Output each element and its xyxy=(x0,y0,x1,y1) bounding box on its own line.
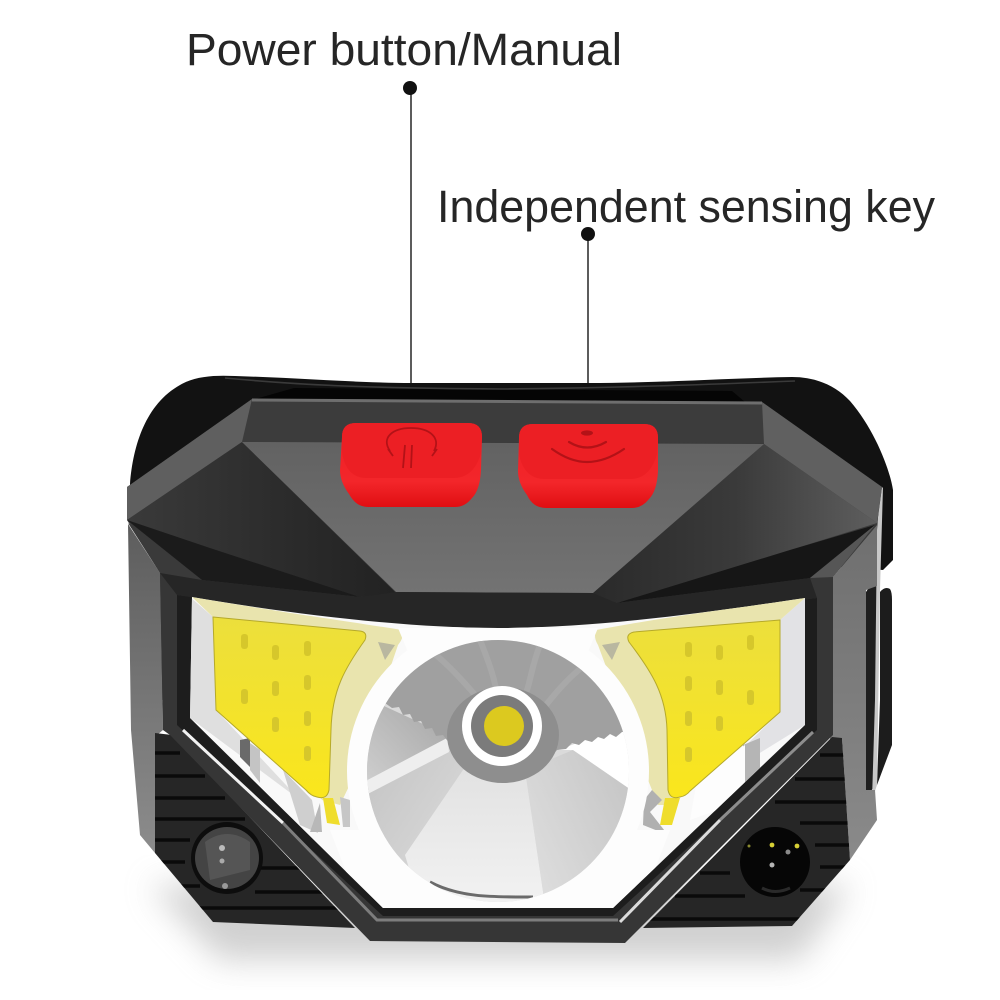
right IR sensor lens xyxy=(740,827,810,897)
left upper facet xyxy=(127,399,252,520)
right lower facet xyxy=(617,525,875,603)
centre facet xyxy=(242,442,764,593)
lower centre facet xyxy=(405,770,545,905)
left dark facet xyxy=(127,442,396,597)
lens window glass xyxy=(190,597,805,908)
icon: power symbol xyxy=(387,428,437,468)
headlamp body xyxy=(127,376,893,960)
lens window frame xyxy=(160,573,833,943)
ground shadow xyxy=(150,885,850,960)
upper left facet xyxy=(367,706,446,780)
main LED xyxy=(462,686,542,766)
white facet xyxy=(559,732,629,788)
lower right facet xyxy=(550,750,628,890)
infographic: headlamp with labelled controls xyxy=(127,32,935,974)
callout line: power button xyxy=(403,81,417,384)
right COB LED panel xyxy=(628,620,780,798)
upper grey fan xyxy=(386,640,623,752)
right dark facet xyxy=(593,444,877,603)
heading label: Independent sensing key: Independent sensing key xyxy=(437,181,935,232)
bright stripe xyxy=(368,738,449,794)
lower left facet xyxy=(368,751,462,866)
left lower facet xyxy=(127,520,360,597)
right upper facet xyxy=(762,402,882,523)
left sensor grille xyxy=(150,733,355,928)
left side panel xyxy=(128,524,163,853)
left motion sensor lens xyxy=(191,822,263,894)
heading label: Power button/Manual: Power button/Manual xyxy=(186,24,622,75)
right side strap xyxy=(865,487,892,800)
icon: sensing waves xyxy=(552,430,624,462)
top recess xyxy=(242,399,764,443)
brow band xyxy=(160,573,817,632)
callout line: sensing key xyxy=(581,227,595,384)
rear shell xyxy=(130,376,893,570)
reflector cup xyxy=(360,635,640,905)
body backing xyxy=(127,399,882,700)
right sensor grille xyxy=(643,737,850,928)
frame inner dark line xyxy=(177,595,817,916)
right side panel xyxy=(830,525,877,860)
sensing key button xyxy=(518,424,658,508)
centre white reflector ring xyxy=(346,627,668,908)
power button xyxy=(340,423,482,507)
glass side reflections xyxy=(190,597,805,835)
left COB LED panel xyxy=(213,617,366,798)
